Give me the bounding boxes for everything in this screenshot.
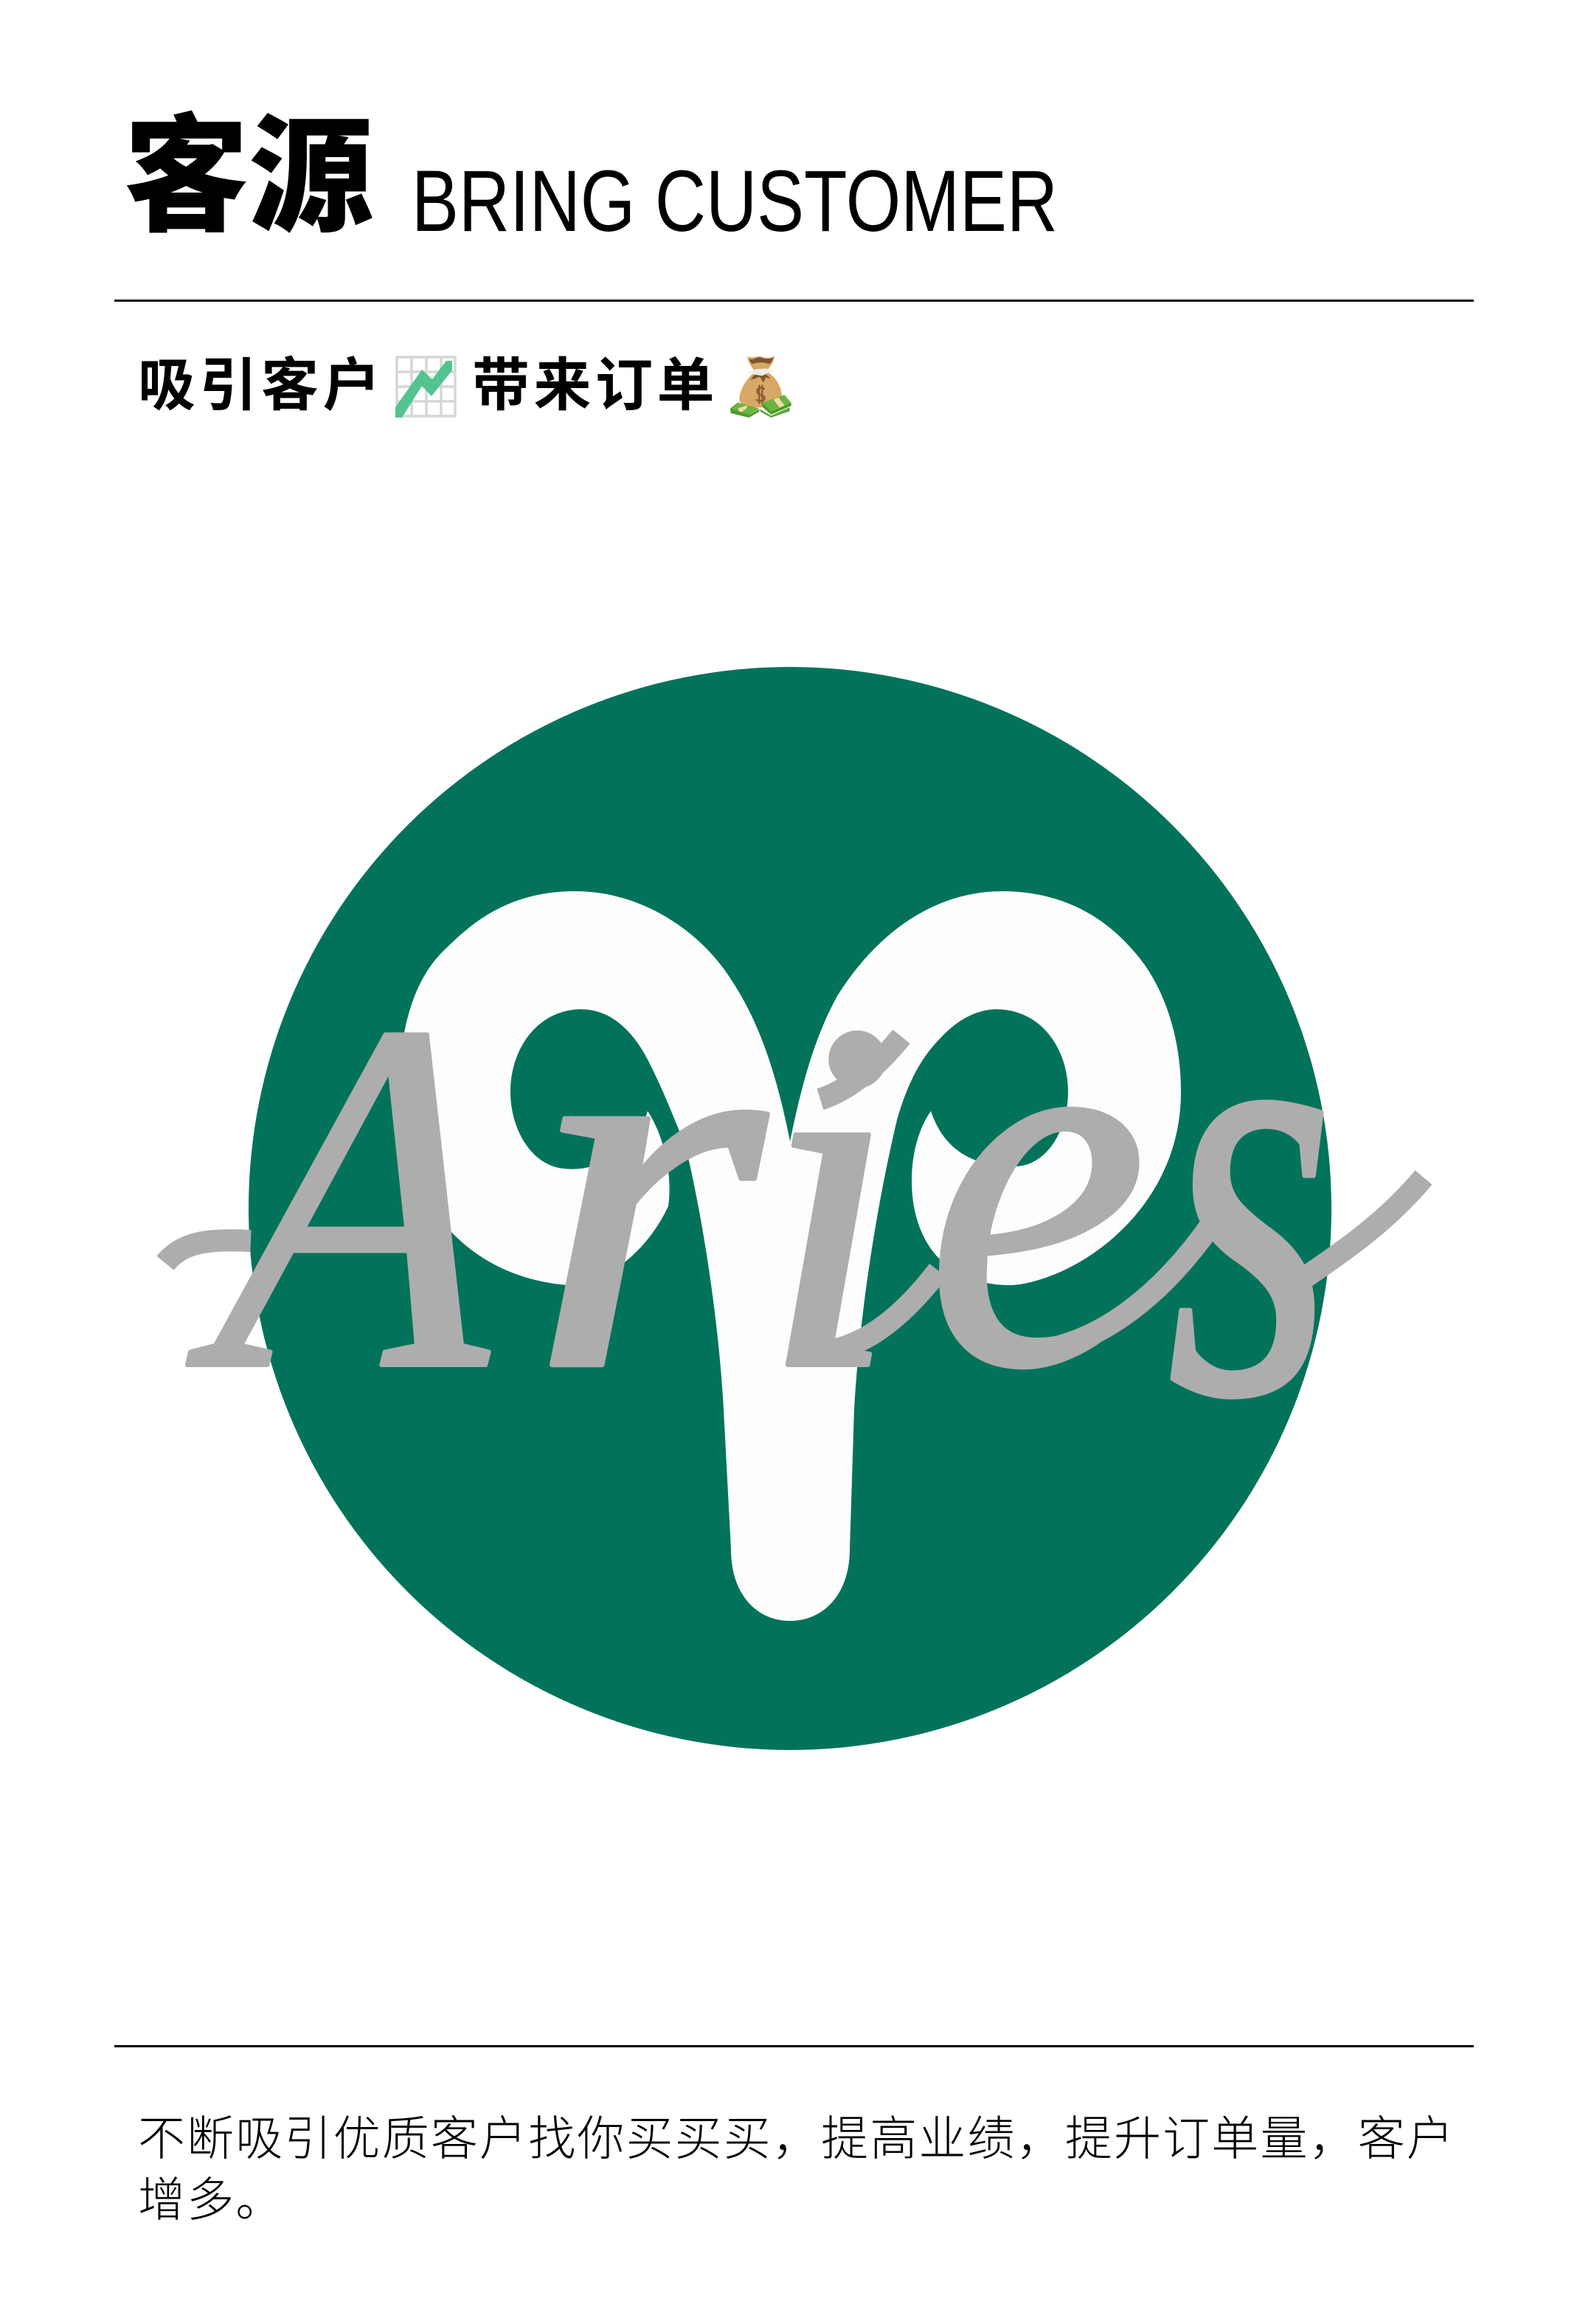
icon: rising chart [395, 356, 457, 418]
script wordmark: Aries: A [176, 919, 522, 1473]
body text: 增多。 [138, 2173, 284, 2227]
body text: 不断吸引优质客户找你买买买，提高业绩，提升订单量，客户 [138, 2112, 1455, 2165]
subheading: 带来订单: 带来订单 [472, 353, 718, 418]
subheading: 吸引客户: 吸引客户 [138, 353, 384, 418]
script wordmark: Aries: e [926, 884, 1148, 1479]
script wordmark: Aries: i [760, 919, 899, 1474]
swash strokes joining the letters [165, 1037, 1424, 1352]
Aries ram-horn symbol [399, 891, 1181, 1621]
title: BRING CUSTOMER: BRING CUSTOMER [412, 153, 1058, 250]
body text [138, 2112, 1455, 2227]
top divider [114, 300, 1474, 302]
title: 客源: 客源 [124, 106, 373, 248]
green circle [249, 667, 1331, 1750]
script wordmark: Aries: r [527, 887, 776, 1481]
logo: green circle with Aries symbol [249, 667, 1331, 1750]
bottom divider [114, 2045, 1474, 2047]
icon: money bag [730, 356, 791, 418]
script wordmark: Aries [165, 845, 1424, 1524]
script wordmark: Aries: s [1167, 845, 1335, 1524]
